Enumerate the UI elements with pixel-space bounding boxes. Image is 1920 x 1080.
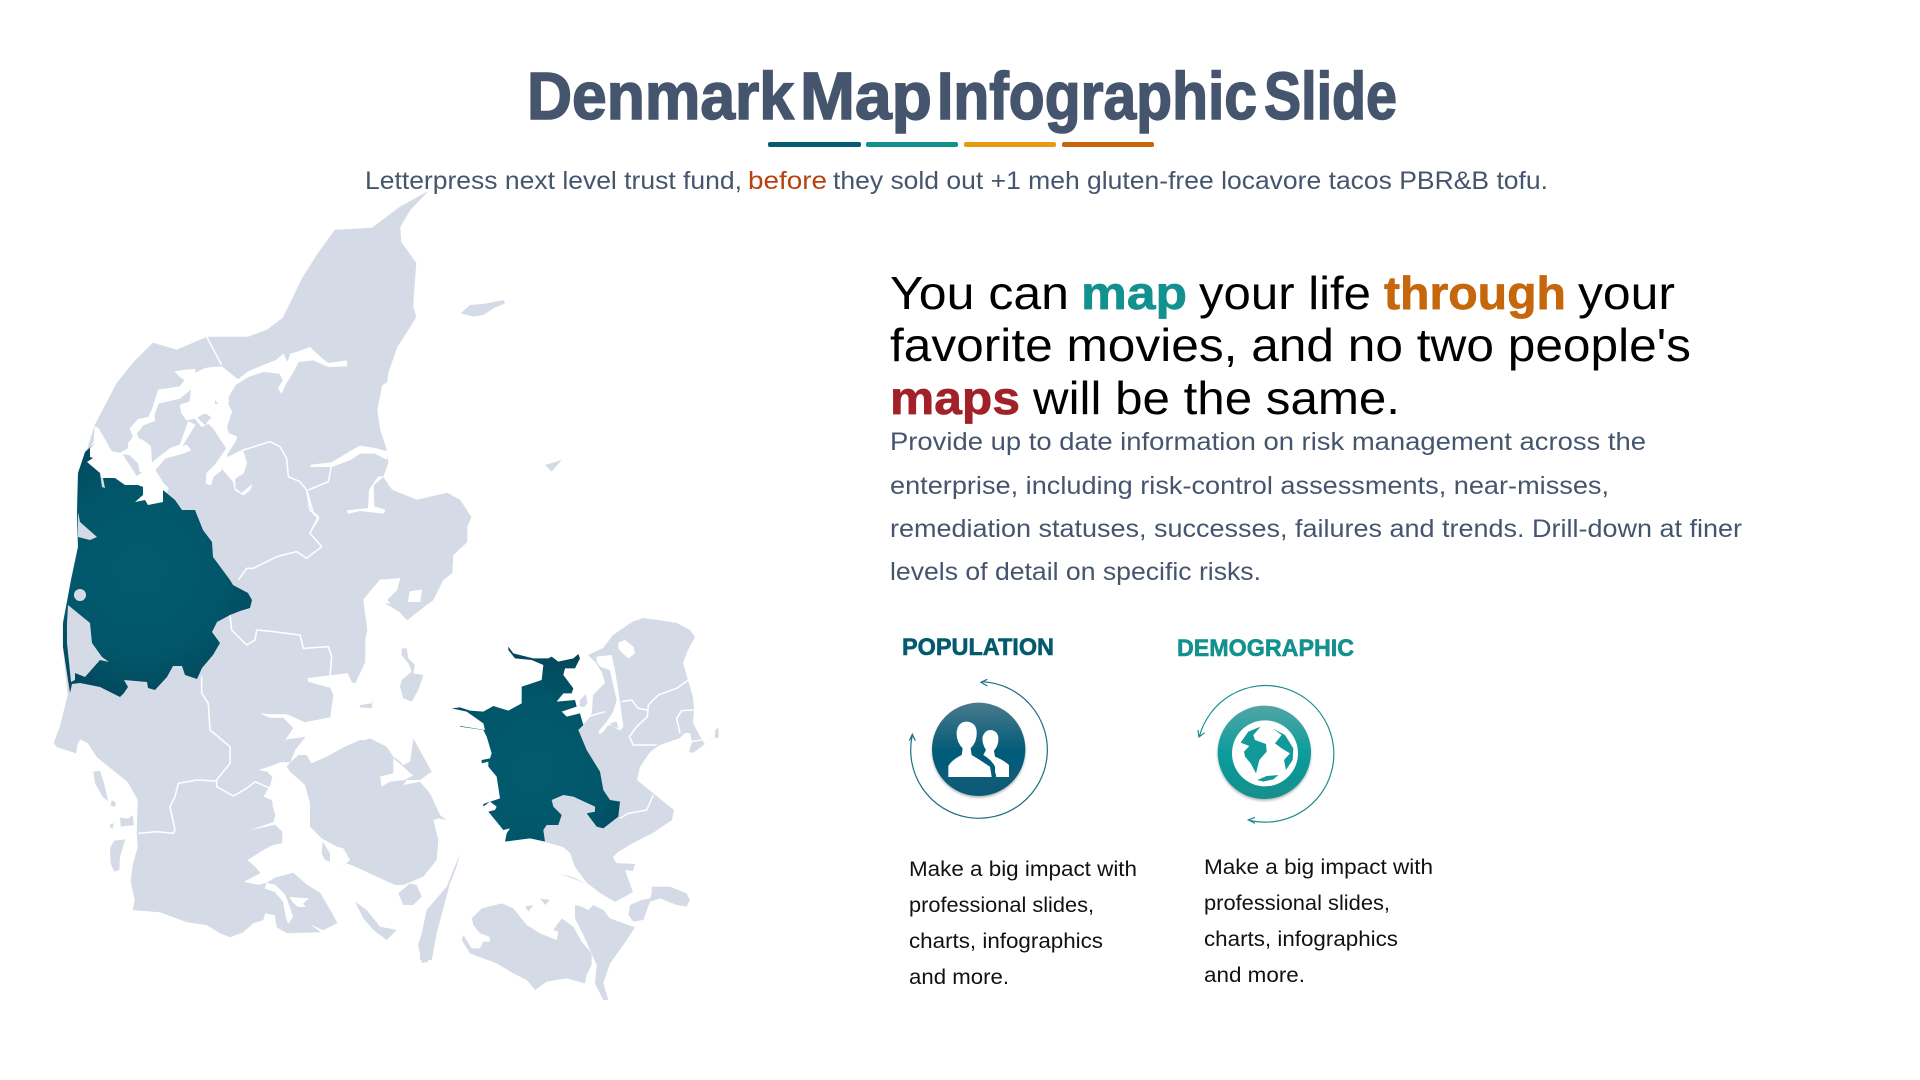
map: Anholt [461, 300, 505, 317]
map: Wadden islands [93, 771, 134, 872]
title: Denmark [527, 59, 795, 134]
title: Map [800, 59, 932, 134]
heading: your [1578, 267, 1675, 319]
map: Funen and islands [287, 648, 460, 960]
population description: Make a big impact with [909, 858, 1137, 881]
map: Laeso speck [545, 460, 562, 472]
title: Slide [1264, 59, 1397, 134]
heading: will be the same. [1032, 372, 1400, 424]
demographic heading: DEMOGRAPHIC [1177, 635, 1354, 662]
map: borders south [138, 615, 332, 833]
body paragraph: remediation statuses, successes, failures and trends. Drill-down at finer [890, 515, 1742, 543]
heading: maps [890, 372, 1020, 424]
map: highlighted region east [452, 647, 620, 842]
demographic description: professional slides, [1204, 892, 1390, 915]
subtitle: before [748, 167, 827, 195]
map of Denmark [54, 192, 719, 1000]
population heading: POPULATION [902, 634, 1054, 661]
panel: demographic [1177, 635, 1433, 987]
map: borders north [207, 337, 332, 530]
title underline bars [768, 142, 1154, 147]
demographic description [1204, 856, 1433, 987]
demographic description: charts, infographics [1204, 928, 1398, 951]
body paragraph: Provide up to date information on risk management across the [890, 428, 1646, 456]
map: Jutland landmass [54, 192, 471, 937]
map: small fjords east Jutland [311, 446, 422, 603]
population description: charts, infographics [909, 930, 1103, 953]
map: Limfjord [87, 347, 347, 506]
population description [909, 858, 1137, 989]
heading: map [1081, 267, 1187, 319]
panel: population [902, 634, 1137, 989]
map: borders central [238, 490, 322, 580]
population description: professional slides, [909, 894, 1094, 917]
subtitle: they sold out +1 meh gluten-free locavore tacos PBR&B tofu. [833, 167, 1548, 195]
body paragraph: levels of detail on specific risks. [890, 558, 1261, 586]
body paragraph: enterprise, including risk-control assessments, near-misses, [890, 472, 1609, 500]
title [527, 59, 1397, 134]
map: Zealand [533, 618, 705, 902]
icon: globe with circular arrows [1198, 686, 1334, 823]
map: Zealand fjords and borders [579, 640, 719, 818]
body paragraph [890, 428, 1742, 586]
heading: through [1384, 267, 1566, 319]
subtitle: Letterpress next level trust fund, [365, 167, 742, 195]
population description: and more. [909, 966, 1009, 989]
map: Lolland, Falster and Mon [462, 873, 690, 1000]
title: Infographic [937, 59, 1257, 134]
heading: favorite movies, and no two people's [890, 319, 1691, 371]
heading: You can [890, 267, 1069, 319]
subtitle [365, 167, 1548, 195]
heading: your life [1199, 267, 1371, 319]
icon: people with circular arrows [909, 679, 1047, 818]
heading [890, 267, 1691, 424]
demographic description: and more. [1204, 964, 1305, 987]
demographic description: Make a big impact with [1204, 856, 1433, 879]
map: Langeland south tip [418, 933, 432, 963]
map: Als channel details [263, 797, 308, 923]
map: highlighted region west [63, 443, 252, 697]
